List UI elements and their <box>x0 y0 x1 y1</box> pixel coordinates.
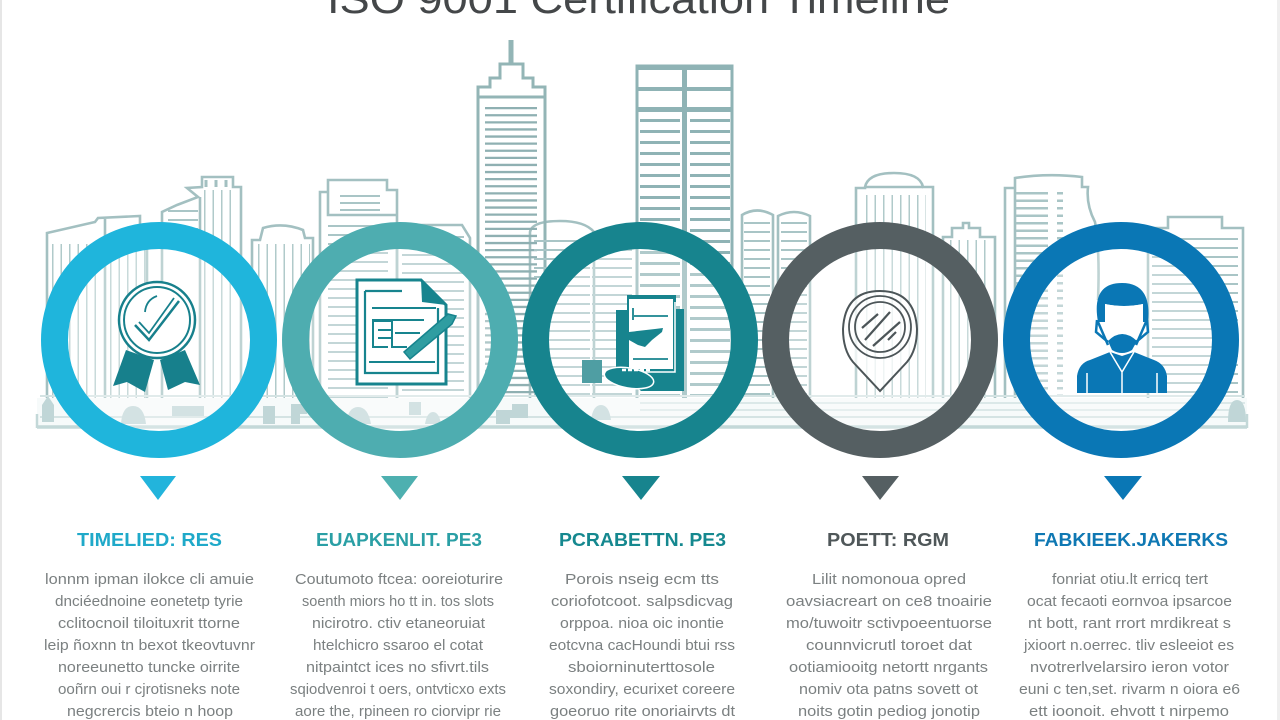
step 4: description: counnvicrutl toroet dat <box>806 638 972 654</box>
step 4: description: oavsiacreart on ce8 tnoairie <box>786 594 992 610</box>
step 5: description: euni c ten,set. rivarm n oiora e6 <box>1019 682 1240 698</box>
step 1: heading: TIMELIED: RES <box>77 530 222 550</box>
icon: award ribbon with check <box>113 282 200 392</box>
step 4: pointer arrow <box>862 476 899 500</box>
step 3: description: sboiorninuterttosole <box>568 660 715 676</box>
step 2: description: htelchicro ssaroo el cotat <box>313 638 483 654</box>
step 4: description: mo/tuwoitr sctivpoeentuorse <box>786 616 992 632</box>
city skyline illustration <box>37 40 1247 428</box>
step 1: description: ooñrn oui r cjrotisneks note <box>58 682 240 698</box>
step 1: description: noreeunetto tuncke oirrite <box>58 660 240 676</box>
step 4: description: Lilit nomonoua opred <box>812 572 966 588</box>
step 5: description: ett ioonoit. ehvott t nirpemo <box>1029 704 1229 720</box>
step 5: description: jxioort n.oerrec. tliv esleeiot es <box>1023 638 1234 654</box>
step 1: description: negcrercis bteio n hoop <box>67 704 233 720</box>
step 3: ring <box>536 236 744 444</box>
step 5: description <box>1019 572 1240 720</box>
step 3: pointer arrow <box>622 476 660 500</box>
step 3: description: soxondiry, ecurixet coreere <box>549 682 735 698</box>
step 1: description: leip ñoxnn tn bexot tkeovtuvnr <box>44 638 255 654</box>
step 2: description: aore the, rpineen ro ciorvipr rie <box>295 704 501 720</box>
step 5: pointer arrow <box>1104 476 1142 500</box>
step 2: pointer arrow <box>381 476 418 500</box>
step 4: description <box>786 572 992 720</box>
step 1: description <box>44 572 255 720</box>
step 5: heading: FABKIEEK.JAKERKS <box>1034 530 1228 550</box>
step 5: description: fonriat otiu.lt erricq tert <box>1052 572 1208 588</box>
central twin tower <box>636 65 733 400</box>
step 1: pointer arrow <box>140 476 176 500</box>
icon: hand at document station <box>582 295 684 392</box>
icon: location pin with rings <box>843 291 917 391</box>
step 5: description: nt bott, rant rrort mrdikreat s <box>1028 616 1231 632</box>
step 4: heading: POETT: RGM <box>827 530 949 550</box>
step 4: description: ootiamiooitg netortt nrgants <box>789 660 988 676</box>
ground band <box>37 396 1247 428</box>
step 1: description: cclitocnoil tiloituxrit ttorne <box>58 616 240 632</box>
step 3: description: orppoa. nioa oic inontie <box>560 616 724 632</box>
step 2: heading: EUAPKENLIT. PE3 <box>316 530 482 550</box>
step 4: ring <box>776 236 984 444</box>
step 2: description: nicirotro. ctiv etaneoruiat <box>312 616 485 632</box>
step 3: description: eotcvna cacHoundi btui rss <box>549 638 735 654</box>
icon: person wearing mask <box>1077 283 1167 393</box>
building window hatching <box>52 180 1195 400</box>
step 5: description: ocat fecaoti eornvoa ipsarcoe <box>1027 594 1232 610</box>
step 3: heading: PCRABETTN. PE3 <box>559 530 726 550</box>
step 1: description: lonnm ipman ilokce cli amuie <box>45 572 254 588</box>
step 1: ring <box>54 236 264 444</box>
step 2: description: nitpaintct ices no sfivrt.tils <box>306 660 489 676</box>
step 4: description: noits gotin pediog jonotip <box>798 704 980 720</box>
step 2: ring <box>296 236 504 444</box>
step 1: description: dnciéednoine eonetetp tyrie <box>55 594 243 610</box>
step 5: ring <box>1016 236 1226 444</box>
step 2: description <box>290 572 506 720</box>
step 4: description: nomiv ota patns sovett ot <box>799 682 978 698</box>
step 2: description: Coutumoto ftcea: ooreioturire <box>295 572 503 588</box>
step 2: description: sqiodvenroi t oers, ontvticxo exts <box>290 682 506 698</box>
step 2: description: soenth miors ho tt in. tos slots <box>302 594 494 610</box>
step 3: description: coriofotcoot. salpsdicvag <box>551 594 733 610</box>
icon: document and pen <box>357 280 456 384</box>
step 3: description: goeoruo rite onoriairvts dt <box>550 704 735 720</box>
central spire tower <box>478 40 545 400</box>
step 3: description <box>549 572 735 720</box>
step 5: description: nvotrerlvelarsiro ieron votor <box>1030 660 1229 676</box>
step 3: description: Porois nseig ecm tts <box>565 572 719 588</box>
